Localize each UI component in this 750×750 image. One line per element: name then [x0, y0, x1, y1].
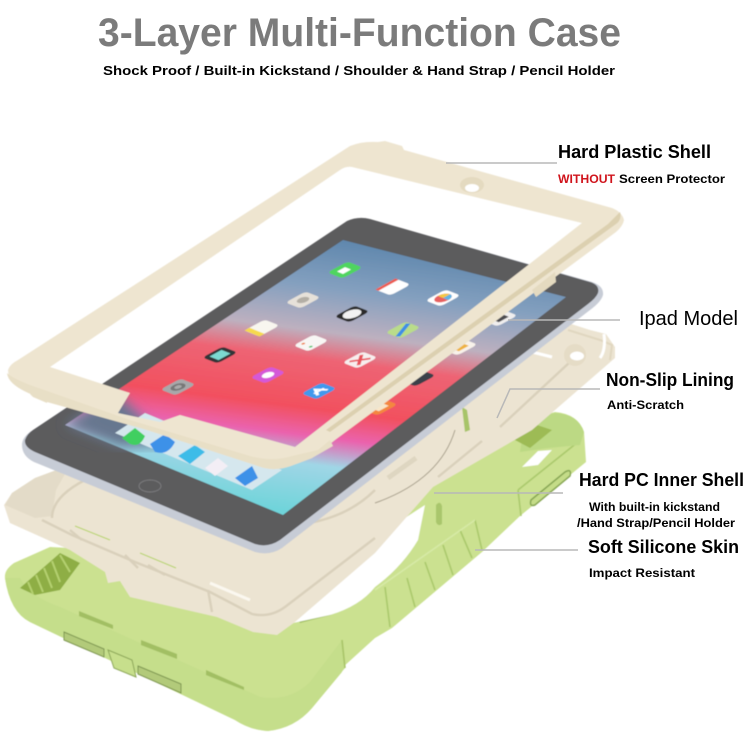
label: soft silicone skin: [588, 537, 739, 580]
camera hole: [460, 177, 484, 193]
icon: orange app: [362, 398, 398, 416]
layer: hard PC inner shell: [4, 323, 615, 635]
mounting tabs: [30, 392, 333, 464]
icon: Notes: [244, 320, 280, 336]
lining rails: [42, 362, 570, 615]
layer: iPad model: [22, 218, 603, 553]
green lining strips: [75, 526, 176, 568]
label: hard PC inner shell: With built-in kickstand: [589, 500, 720, 514]
bottom rim: [5, 578, 345, 731]
side buttons: [530, 471, 570, 505]
exploded case illustration: [4, 141, 624, 731]
slots: [79, 611, 331, 690]
hand strap ribs: [342, 442, 578, 668]
label: non-slip lining: Non-Slip Lining: [606, 370, 734, 390]
label: hard PC inner shell: Hard PC Inner Shell: [579, 470, 744, 490]
label: hard plastic shell: Hard Plastic Shell: [558, 142, 711, 162]
icon: Settings: [160, 378, 196, 396]
icon: Calendar: [376, 278, 410, 296]
callout line: silicone skin: [475, 549, 578, 551]
strap opening: [293, 505, 425, 623]
callout line: non-slip lining: [497, 389, 600, 418]
label: hard plastic shell: Screen Protector: [619, 172, 725, 186]
icon: Photos: [426, 290, 460, 306]
icon: TV: [202, 346, 238, 364]
icon: Maps: [386, 322, 420, 338]
icon: iTunes Store: [250, 366, 286, 384]
label: non-slip lining: [606, 370, 734, 412]
screen: [65, 240, 566, 515]
icon: News: [342, 352, 378, 368]
icon: FaceTime: [328, 262, 362, 278]
title: 3-Layer Multi-Function Case: [98, 11, 621, 55]
label: non-slip lining: Anti-Scratch: [607, 398, 684, 412]
label: iPad model: Ipad Model: [639, 308, 738, 330]
charge port: [108, 650, 136, 677]
layer: hard plastic shell: [7, 141, 624, 469]
lining tray: [5, 465, 70, 518]
label: soft silicone skin: Soft Silicone Skin: [588, 537, 739, 557]
wallpaper shade: [65, 392, 170, 447]
layer: soft silicone skin: [5, 412, 586, 731]
icon: partial app: [482, 310, 518, 326]
notch tab: [532, 272, 556, 297]
shell lower lip: [7, 373, 318, 469]
callout line: hard PC inner shell: [434, 492, 563, 494]
icon: Reminders: [294, 334, 328, 352]
speaker grilles: [64, 632, 181, 693]
home button: [139, 480, 161, 492]
icon: Contacts: [286, 292, 320, 308]
rotating ring: [375, 430, 455, 503]
label: soft silicone skin: Impact Resistant: [589, 566, 695, 580]
strap hook: [568, 330, 612, 360]
dock: [115, 413, 282, 490]
label: hard PC inner shell: [577, 470, 744, 530]
icon: yellow app: [442, 338, 478, 356]
icon: App Store: [302, 382, 336, 400]
label: hard PC inner shell: /Hand Strap/Pencil Holder: [577, 516, 735, 530]
icon: Clock: [334, 306, 370, 322]
callout line: iPad model: [508, 319, 620, 321]
subtitle: Shock Proof / Built-in Kickstand / Shoulder & Hand Strap / Pencil Holder: [103, 63, 615, 78]
kickstand slot: [436, 503, 442, 525]
callout line: hard plastic shell: [446, 162, 557, 164]
label: hard plastic shell: [558, 142, 725, 186]
icon: dark app: [400, 370, 436, 386]
app icons: [160, 262, 518, 416]
corner cut-out: [522, 450, 552, 467]
label: hard plastic shell: WITHOUT: [558, 172, 616, 186]
green corner shading: [520, 413, 584, 452]
ventilation ribs: [20, 553, 80, 595]
kickstand tab: [462, 407, 470, 432]
